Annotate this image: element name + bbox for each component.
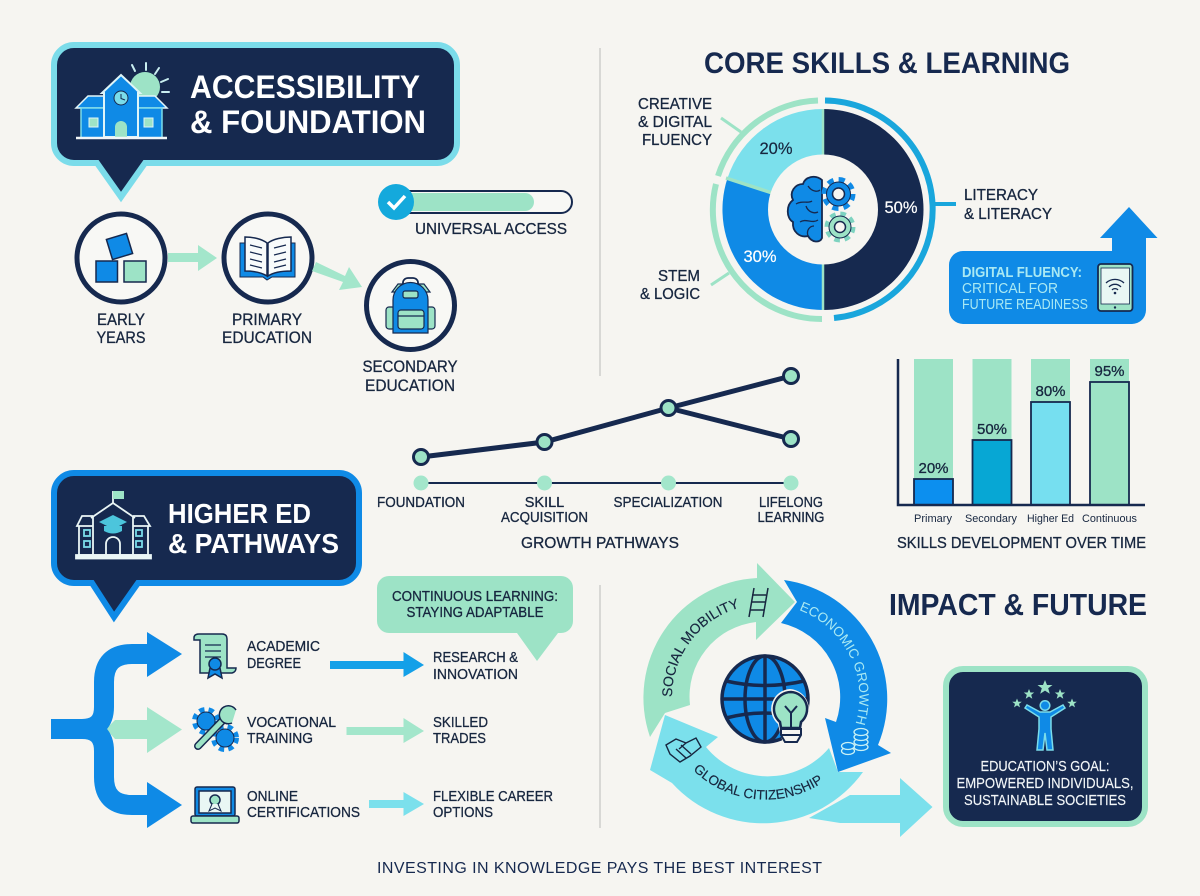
heading text: ACCESSIBILITY	[190, 69, 420, 105]
icon: globe with lightbulb	[722, 656, 809, 746]
goal box: empowered individuals	[946, 669, 1145, 824]
percentage labels: 20%	[759, 140, 793, 158]
icon: open book	[240, 237, 295, 280]
stage: primary education: PRIMARY	[232, 310, 302, 329]
callout: digital fluency with up arrow: FUTURE READINESS	[962, 297, 1088, 313]
goal box: empowered individuals: EMPOWERED INDIVIDUALS,	[956, 775, 1134, 792]
chart title: SKILLS DEVELOPMENT OVER TIME	[897, 535, 1146, 552]
axis labels: LIFELONG	[759, 495, 823, 511]
panel: core skills and learning	[638, 47, 1158, 324]
pathway: academic degree: DEGREE	[247, 655, 301, 672]
callout: continuous learning: CONTINUOUS LEARNING:	[392, 588, 558, 605]
arrow: vocational to trades	[346, 718, 424, 743]
icon: coins	[842, 728, 868, 754]
percentage labels: 30%	[743, 248, 777, 266]
bar values: 20%	[918, 460, 949, 477]
cycle arrow: global citizenship	[650, 715, 863, 824]
heading banner: higher ed and pathways	[54, 473, 359, 617]
icon: handshake	[666, 738, 701, 762]
chart title: GROWTH PATHWAYS	[521, 535, 679, 552]
panel: accessibility and foundation	[54, 45, 572, 395]
pathway: online certifications	[191, 787, 360, 823]
arrow: primary to secondary	[312, 262, 362, 290]
axis labels: SKILL	[525, 495, 564, 511]
icon: university	[76, 491, 151, 558]
pathway: online certifications: CERTIFICATIONS	[247, 804, 360, 821]
progress bar: universal access	[378, 184, 572, 238]
panel: higher education and pathways	[51, 473, 573, 828]
outcome: skilled trades: SKILLED	[433, 714, 488, 731]
goal box: empowered individuals: EDUCATION’S GOAL:	[980, 758, 1110, 775]
percentage labels	[743, 140, 918, 266]
percentage labels: 50%	[884, 199, 918, 217]
label: creative and digital fluency: FLUENCY	[642, 132, 712, 149]
label: creative and digital fluency: CREATIVE	[638, 96, 712, 113]
stage: early years: EARLY	[97, 310, 145, 329]
callout: continuous learning: STAYING ADAPTABLE	[406, 604, 544, 621]
line chart: growth pathways	[377, 368, 824, 552]
footer tagline: INVESTING IN KNOWLEDGE PAYS THE BEST INTEREST	[377, 860, 822, 877]
label: stem and logic: STEM	[658, 268, 700, 285]
bar labels: Continuous	[1082, 513, 1137, 525]
bar labels: Higher Ed	[1027, 513, 1074, 525]
pathway: academic degree: ACADEMIC	[247, 638, 320, 655]
heading: impact and future: IMPACT & FUTURE	[889, 587, 1147, 622]
cycle arrow: global citizenship: GLOBAL CITIZENSHIP	[695, 765, 820, 800]
arrow: degree to research	[330, 652, 424, 677]
icon: ladder	[749, 588, 768, 617]
stage: early years	[77, 214, 165, 347]
label: creative and digital fluency: & DIGITAL	[638, 114, 712, 131]
bar values: 50%	[977, 421, 1007, 438]
donut chart: skill shares	[711, 100, 956, 319]
heading text: & FOUNDATION	[190, 104, 426, 140]
axis labels: SPECIALIZATION	[614, 495, 722, 511]
heading: core skills and learning: CORE SKILLS & LEARNING	[704, 47, 1070, 80]
arrow: online to flexible career	[369, 792, 424, 816]
pathway: vocational training: VOCATIONAL	[247, 714, 336, 731]
cycle arrow: economic growth	[781, 580, 891, 772]
stage: secondary education: EDUCATION	[365, 376, 455, 395]
callout: digital fluency with up arrow	[949, 207, 1158, 324]
stage: primary education	[222, 214, 312, 347]
bar labels: Primary	[914, 513, 952, 525]
label: stem and logic: & LOGIC	[640, 286, 700, 303]
outcome: skilled trades: TRADES	[433, 730, 486, 747]
icon: diploma scroll	[194, 634, 236, 678]
outcome: flexible career options: OPTIONS	[433, 804, 493, 821]
icon: school with sun	[76, 63, 169, 138]
label: literacy: LITERACY	[964, 187, 1038, 204]
panel: impact and future	[643, 563, 1148, 837]
stage: secondary education	[362, 262, 458, 395]
cycle arrow: economic growth: ECONOMIC GROWTH	[800, 602, 869, 725]
pathway: academic degree	[194, 634, 320, 678]
stage: secondary education: SECONDARY	[362, 357, 458, 376]
outcome: research and innovation: RESEARCH &	[433, 649, 518, 666]
heading banner: accessibility and foundation	[54, 45, 457, 197]
bar values: 95%	[1094, 363, 1125, 380]
bar values: 80%	[1035, 383, 1066, 400]
bar chart: skills development over time	[897, 359, 1146, 552]
axis labels: FOUNDATION	[377, 495, 465, 511]
branching arrows	[51, 632, 182, 828]
callout: digital fluency with up arrow: DIGITAL FLUENCY:	[962, 265, 1082, 281]
icon: tablet with wifi	[1098, 264, 1132, 311]
cycle arrow: social mobility: SOCIAL MOBILITY	[662, 598, 736, 696]
stage: primary education: EDUCATION	[222, 328, 312, 347]
icon: brain and gears	[788, 177, 853, 242]
pathway: vocational training: TRAINING	[247, 730, 313, 747]
pathway: online certifications: ONLINE	[247, 788, 298, 805]
icon: laptop with badge	[191, 787, 239, 823]
icon: person with stars	[1012, 680, 1077, 750]
icon: wrench and gears	[195, 706, 236, 749]
bar labels: Secondary	[965, 513, 1017, 525]
stage: early years: YEARS	[96, 328, 146, 347]
callout: digital fluency with up arrow: CRITICAL FOR	[962, 281, 1058, 297]
goal box: empowered individuals: SUSTAINABLE SOCIETIES	[964, 792, 1126, 809]
axis labels: ACQUISITION	[501, 510, 588, 526]
heading text: HIGHER ED	[168, 498, 311, 529]
icon: backpack	[386, 278, 435, 333]
cycle arrow: social mobility	[643, 563, 795, 737]
heading text: & PATHWAYS	[168, 528, 339, 559]
progress bar: universal access: UNIVERSAL ACCESS	[415, 221, 567, 238]
cycle diagram	[643, 563, 891, 824]
callout: continuous learning	[377, 576, 573, 661]
icon: blocks	[96, 233, 146, 282]
outcome: flexible career options: FLEXIBLE CAREER	[433, 788, 553, 805]
pathway: vocational training	[195, 706, 336, 749]
arrow: cycle to goal	[809, 778, 932, 837]
label: literacy: & LITERACY	[964, 206, 1052, 223]
arrow: early years to primary	[168, 245, 217, 271]
outcome: research and innovation: INNOVATION	[433, 666, 518, 683]
axis labels: LEARNING	[758, 510, 824, 526]
